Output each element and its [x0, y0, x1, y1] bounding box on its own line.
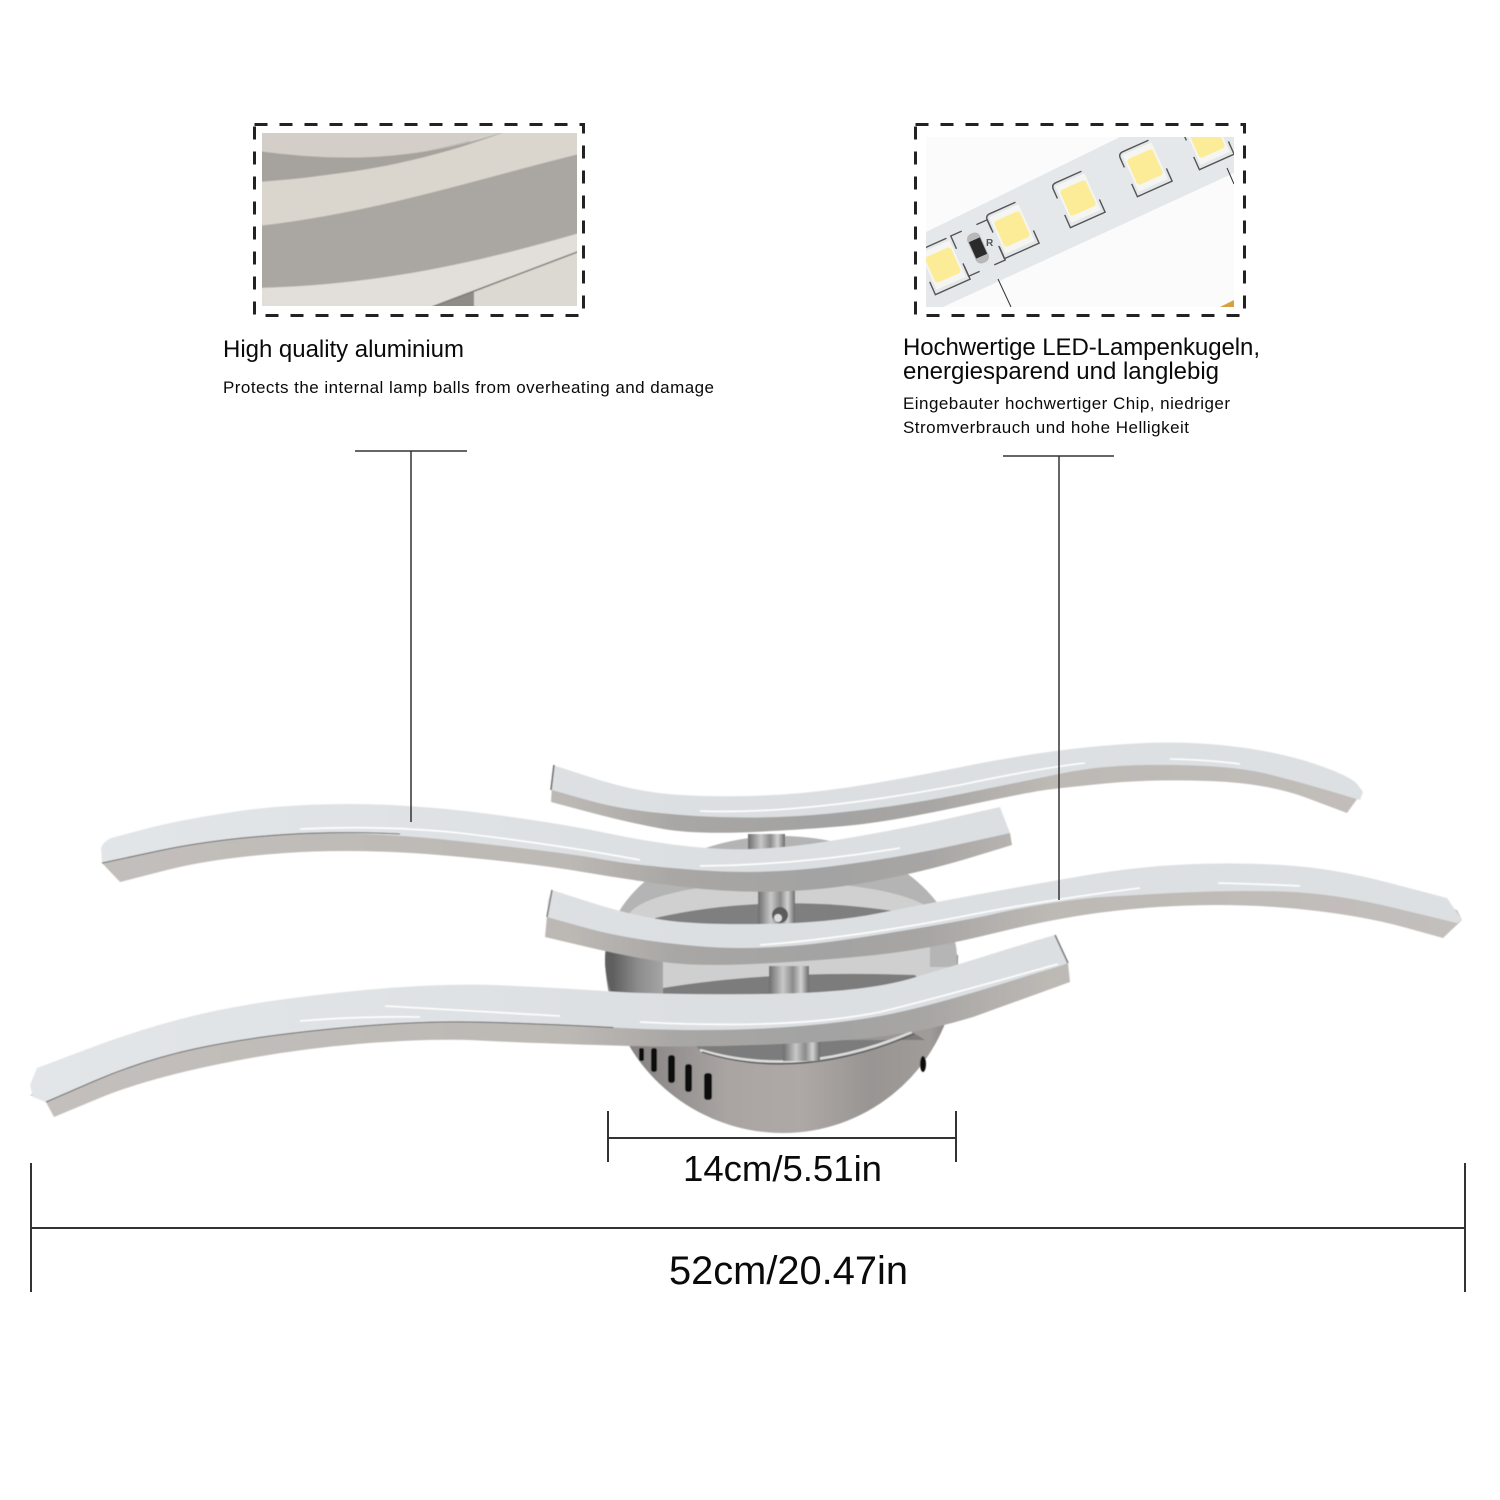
vent slots [639, 1048, 926, 1100]
lamp base [605, 834, 960, 1133]
infographic canvas [30, 123, 1466, 1292]
callout line: LED [1003, 456, 1114, 900]
description: LED [903, 394, 1230, 437]
heading: LED: energiesparend und langlebig [903, 358, 1219, 385]
photo: aluminium profile close-up [258, 128, 583, 310]
photo: LED strip close-up: R [986, 238, 994, 249]
light bar: middle right [545, 863, 1462, 965]
heading: LED: Hochwertige LED-Lampenkugeln, [903, 334, 1260, 361]
text block: LED [903, 334, 1260, 437]
text block: aluminium [223, 336, 714, 397]
description: LED: Eingebauter hochwertiger Chip, niedriger [903, 394, 1230, 413]
photo: LED strip close-up [926, 137, 1234, 307]
label: 52cm: 52cm/20.47in [669, 1249, 908, 1293]
panel: aluminium detail [254, 124, 584, 316]
description: aluminium: Protects the internal lamp balls from overheating and damage [223, 378, 714, 397]
light bar: front left [30, 935, 1070, 1117]
dimension: overall width [31, 1163, 1465, 1293]
dashed frame: LED [916, 124, 1244, 316]
lamp illustration [30, 742, 1462, 1133]
light bar: back left [101, 804, 1012, 892]
panel: LED detail [916, 111, 1244, 315]
light bar: back right [551, 742, 1363, 833]
support posts [748, 834, 820, 1061]
callout line: aluminium [355, 451, 467, 822]
heading: aluminium: High quality aluminium [223, 336, 464, 363]
dimension: base width [608, 1111, 956, 1189]
label: 14cm: 14cm/5.51in [683, 1148, 882, 1189]
description: LED: Stromverbrauch und hohe Helligkeit [903, 418, 1189, 437]
dashed frame: aluminium [254, 124, 584, 316]
heading: LED [903, 334, 1260, 385]
